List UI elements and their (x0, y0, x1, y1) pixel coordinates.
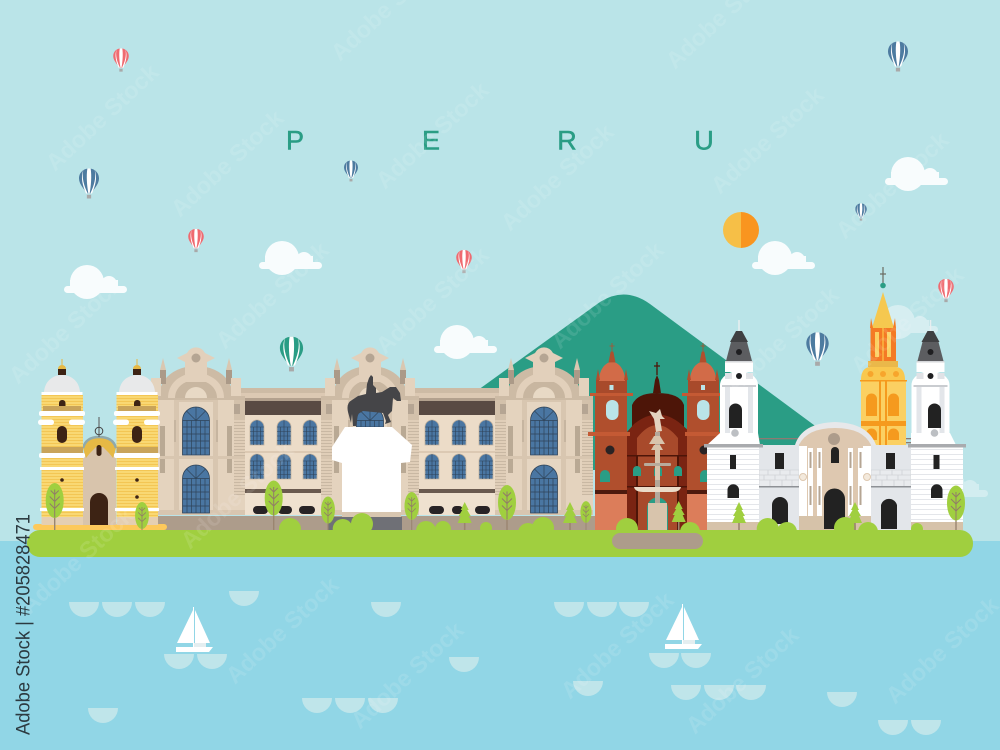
stock watermark text: Adobe Stock (721, 281, 844, 399)
stock watermark text: Adobe Stock (4, 271, 127, 389)
right gallery wing (871, 445, 911, 530)
church right tower (113, 359, 160, 525)
white pedestal (332, 427, 412, 512)
stock watermark text: Adobe Stock (881, 591, 1000, 709)
palace wing windows (250, 420, 493, 479)
stock watermark text: Adobe Stock (176, 436, 299, 554)
equestrian statue (348, 375, 401, 426)
stock watermark text: Adobe Stock (681, 621, 804, 739)
white cathedral (704, 267, 966, 530)
left white tower (704, 320, 763, 530)
stock watermark text: Adobe Stock (41, 58, 164, 176)
stock watermark text: Adobe Stock (16, 501, 139, 619)
stock watermark text: Adobe Stock (346, 616, 469, 734)
stock watermark text: Adobe Stock (166, 104, 289, 222)
church left tower (38, 359, 85, 525)
mountain (478, 294, 818, 470)
trees (46, 480, 965, 554)
palace side and centre pavilions (147, 347, 593, 515)
right white tower (908, 320, 966, 530)
cathedral right tower (682, 343, 727, 530)
sun (723, 212, 759, 248)
bushes (279, 513, 923, 543)
stock watermark text: Adobe Stock (846, 261, 969, 379)
stock watermark text: Adobe Stock (211, 236, 334, 354)
green island (27, 530, 973, 557)
sea waves (69, 591, 941, 735)
orange bell tower (860, 267, 907, 445)
central portal (795, 422, 876, 530)
palace of government (147, 347, 595, 530)
stock watermark text: Adobe Stock (371, 76, 494, 194)
stock watermark text: Adobe Stock (556, 586, 679, 704)
stock watermark text: Adobe Stock (496, 118, 619, 236)
hot air balloons (79, 42, 954, 371)
fountain (634, 409, 681, 532)
yellow church (33, 359, 167, 530)
church yellow base (33, 524, 167, 530)
left gallery wing (759, 445, 799, 530)
palace wings (235, 388, 505, 515)
statue plinth (328, 510, 402, 530)
vertical stock id label: Adobe Stock | #205828471 (12, 514, 34, 735)
title: PERU (286, 126, 714, 156)
stock watermark text: Adobe Stock (831, 126, 954, 244)
red cathedral (588, 343, 727, 530)
sea (0, 541, 1000, 750)
stock watermark text: Adobe Stock (221, 571, 344, 689)
cathedral left tower (588, 343, 633, 530)
clouds (64, 157, 988, 503)
stock watermark text: Adobe Stock (371, 241, 494, 359)
church centre body (83, 417, 116, 525)
stock watermark text: Adobe Stock (706, 81, 829, 199)
palace basement ovals (253, 506, 490, 514)
palace base (155, 516, 595, 530)
sailboats (176, 604, 702, 652)
mountain-side gallery rails (759, 438, 911, 443)
stock watermark text: Adobe Stock (546, 236, 669, 354)
cathedral central facade (627, 362, 690, 530)
fountain basin pad (612, 533, 703, 549)
